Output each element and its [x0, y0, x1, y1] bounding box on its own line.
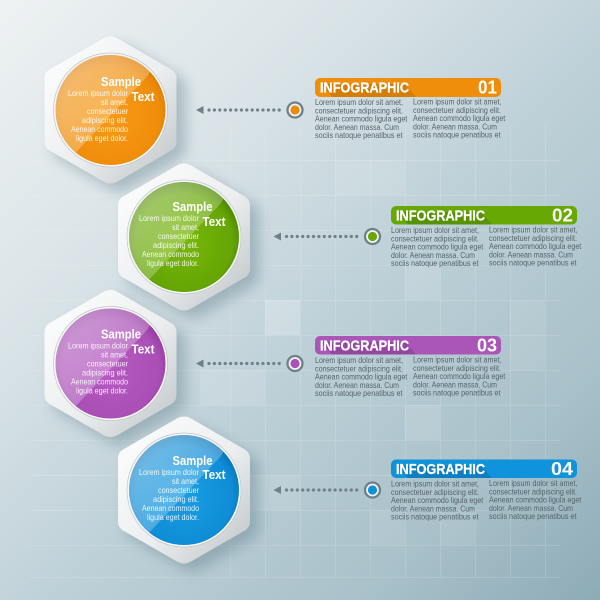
body text 1: [315, 96, 506, 140]
circle text 1: [68, 75, 155, 143]
circle text 1: ligula eget dolor.: [76, 133, 128, 143]
circle text 2: sit amet,: [172, 222, 199, 232]
hexagon 1: orange: [44, 36, 186, 192]
body text 4: Aenean commodo ligula eget: [391, 495, 484, 505]
circle text 1: sit amet,: [101, 97, 128, 107]
body text 4: consectetuer adipiscing elit.: [391, 487, 479, 497]
title bar 2: INFOGRAPHIC: [396, 208, 485, 224]
body text 4: dolor. Aenean massa. Cum: [489, 503, 573, 513]
arrow 1: [196, 102, 302, 118]
circle text 4: Text: [202, 468, 226, 482]
body text 4: sociis natoque penatibus et: [489, 511, 577, 521]
circle text 4: adipiscing elit.: [153, 494, 199, 504]
body text 4: Aenean commodo ligula eget: [489, 495, 582, 505]
circle text 1: Aenean commodo: [71, 124, 128, 134]
circle text 1: Text: [132, 90, 155, 104]
body text 4: Lorem ipsum dolor sit amet,: [391, 478, 479, 488]
body text 1: Lorem ipsum dolor sit amet,: [315, 97, 403, 107]
circle text 4: Lorem ipsum dolor: [139, 467, 199, 477]
circle text 2: Sample: [172, 200, 213, 214]
circle text 3: Lorem ipsum dolor: [68, 340, 128, 350]
hexagon 3: purple: [44, 290, 186, 445]
title bar 1: [315, 78, 501, 98]
body text 3: dolor. Aenean massa. Cum: [315, 380, 399, 390]
panel 4: [391, 459, 582, 522]
body text 1: consectetuer adipiscing elit.: [315, 105, 403, 115]
title bar 3: [315, 336, 501, 356]
hexagon 4: blue: [118, 416, 259, 572]
body text 2: Aenean commodo ligula eget: [489, 241, 582, 251]
body text 1: sociis natoque penatibus et: [413, 130, 501, 140]
body text 2: consectetuer adipiscing elit.: [391, 233, 479, 243]
circle text 2: adipiscing elit.: [153, 240, 199, 250]
body text 1: Lorem ipsum dolor sit amet,: [413, 96, 502, 106]
circle text 4: [139, 454, 226, 522]
body text 3: Aenean commodo ligula eget: [315, 372, 408, 382]
body text 3: consectetuer adipiscing elit.: [413, 363, 501, 373]
body text 1: sociis natoque penatibus et: [315, 130, 403, 140]
body text 2: [391, 224, 582, 268]
background tiles: [30, 125, 560, 578]
circle text 1: Sample: [101, 75, 141, 89]
circle text 3: sit amet,: [101, 350, 128, 360]
title bar 2: [391, 206, 577, 226]
title bar 3: 03: [477, 336, 497, 356]
body text 3: Lorem ipsum dolor sit amet,: [315, 355, 403, 365]
body text 1: Aenean commodo ligula eget: [413, 113, 506, 123]
body text 3: Lorem ipsum dolor sit amet,: [413, 354, 502, 364]
body text 3: Aenean commodo ligula eget: [413, 371, 506, 381]
panel 1: [315, 78, 506, 140]
panel 3: [315, 336, 506, 398]
body text 2: Aenean commodo ligula eget: [391, 242, 484, 252]
circle text 2: ligula eget dolor.: [147, 258, 199, 268]
body text 1: Aenean commodo ligula eget: [315, 114, 408, 124]
body text 2: Lorem ipsum dolor sit amet,: [391, 225, 479, 235]
circle text 1: consectetuer: [87, 106, 128, 116]
body text 3: consectetuer adipiscing elit.: [315, 363, 403, 373]
circle text 3: [68, 328, 155, 396]
arrow 2: [274, 229, 380, 244]
body text 4: sociis natoque penatibus et: [391, 512, 479, 522]
body text 2: sociis natoque penatibus et: [489, 258, 577, 268]
body text 2: Lorem ipsum dolor sit amet,: [489, 224, 578, 234]
body text 2: dolor. Aenean massa. Cum: [391, 250, 475, 260]
circle text 2: [139, 200, 226, 268]
circle text 4: ligula eget dolor.: [147, 512, 199, 522]
body text 2: consectetuer adipiscing elit.: [489, 233, 577, 243]
body text 3: sociis natoque penatibus et: [413, 388, 501, 398]
body text 4: Lorem ipsum dolor sit amet,: [489, 478, 578, 488]
body text 2: dolor. Aenean massa. Cum: [489, 249, 573, 259]
circle text 3: consectetuer: [87, 358, 128, 368]
title bar 1: 01: [478, 78, 497, 98]
circle text 2: Lorem ipsum dolor: [139, 213, 199, 223]
circle text 3: Text: [132, 342, 155, 356]
circle text 3: Sample: [101, 328, 141, 342]
arrow 3: [196, 356, 302, 371]
body text 3: dolor. Aenean massa. Cum: [413, 379, 497, 389]
circle text 1: Lorem ipsum dolor: [68, 88, 128, 98]
body text 3: sociis natoque penatibus et: [315, 388, 403, 398]
circle text 2: Aenean commodo: [142, 249, 199, 259]
circle text 2: consectetuer: [158, 231, 199, 241]
body text 4: consectetuer adipiscing elit.: [489, 486, 577, 496]
body text 3: [315, 354, 506, 398]
title bar 4: INFOGRAPHIC: [396, 462, 485, 478]
title bar 4: [391, 459, 577, 479]
title bar 3: INFOGRAPHIC: [320, 338, 409, 354]
circle text 3: adipiscing elit.: [82, 368, 128, 378]
circle text 3: Aenean commodo: [71, 376, 128, 386]
circle text 2: Text: [202, 215, 226, 229]
circle text 3: ligula eget dolor.: [76, 386, 128, 396]
body text 4: dolor. Aenean massa. Cum: [391, 503, 475, 513]
panel 2: [391, 206, 582, 268]
circle text 4: Sample: [172, 454, 213, 468]
title bar 4: 04: [551, 459, 573, 479]
hexagon 2: green: [118, 164, 259, 318]
title bar 2: 02: [552, 206, 573, 226]
body text 1: dolor. Aenean massa. Cum: [413, 121, 497, 131]
body text 2: sociis natoque penatibus et: [391, 258, 479, 268]
circle text 4: consectetuer: [158, 485, 199, 495]
title bar 1: INFOGRAPHIC: [320, 80, 409, 96]
body text 1: dolor. Aenean massa. Cum: [315, 122, 399, 132]
circle text 1: adipiscing elit.: [82, 115, 128, 125]
body text 4: [391, 478, 582, 522]
circle text 4: Aenean commodo: [142, 503, 199, 513]
circle text 4: sit amet,: [172, 476, 199, 486]
body text 1: consectetuer adipiscing elit.: [413, 105, 501, 115]
arrow 4: [274, 482, 380, 498]
